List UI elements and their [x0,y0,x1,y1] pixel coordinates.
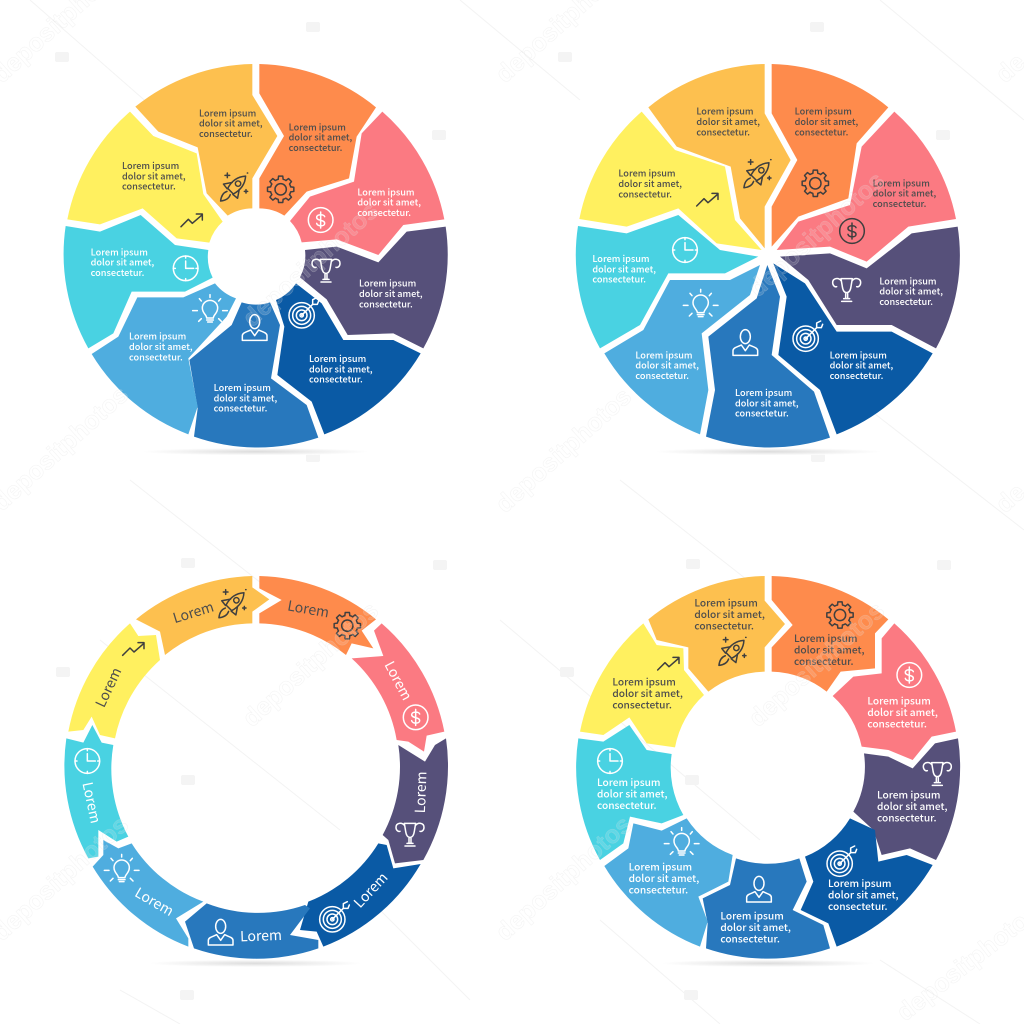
segment: light blue [93,840,203,947]
icon: gear [802,170,828,196]
segment: cyan: Lorem ipsum [597,774,660,789]
panel: bottom-left arrow ring [64,576,448,967]
icon: rocket [214,169,253,208]
watermark text: depositphotos [743,166,890,302]
segment: light blue: Lorem [131,883,177,921]
icon: person [733,330,758,355]
shadow [142,448,369,455]
segment: cyan: Lorem ipsum [91,244,148,258]
segment: orange: consectetur. [794,653,854,668]
icon: trend arrow [697,193,718,206]
segment: purple: dolor sit amet, [879,284,943,298]
segment: dark blue [773,263,933,434]
segment: cyan: Lorem [78,780,106,825]
segment: dark blue: consectetur. [828,898,888,913]
watermark text: depositphotos [743,596,890,732]
icon: target [793,321,823,351]
segment: purple: dolor sit amet, [359,286,423,300]
segment: orange: Lorem ipsum [289,119,346,133]
segment: amber [648,64,791,248]
shadow [661,960,875,967]
segment: cyan: consectetur. [592,272,646,286]
segment: orange [259,576,376,655]
icon: dollar [308,208,333,232]
segment: dark blue: Lorem [349,868,392,912]
icon: light bulb [104,854,139,882]
segment: medium blue: dolor sit amet, [720,919,791,934]
shadow [149,960,362,967]
segment: purple: consectetur. [877,810,937,825]
segment: dark blue: Lorem ipsum [830,347,887,361]
icon: trophy [923,763,951,785]
icon: target [827,846,857,876]
segment: dark blue [300,843,421,947]
segment: orange: dolor sit amet, [289,130,353,144]
segment: cyan: dolor sit amet, [91,255,155,269]
segment: cyan: Lorem ipsum [592,251,650,265]
segment: cyan [64,725,128,858]
segment: light blue: Lorem ipsum [629,859,692,874]
segment: pink: Lorem ipsum [873,175,930,189]
icon: clock [75,749,100,773]
segment: orange [772,576,888,692]
icon: clock [673,238,697,262]
segment: dark blue: consectetur. [309,372,363,386]
segment: dark blue: Lorem ipsum [828,875,891,890]
segment: purple: Lorem [410,771,431,814]
segment: amber: dolor sit amet, [199,116,263,130]
segment: pink [352,623,444,752]
segment: orange: Lorem ipsum [795,104,852,118]
segment: dark blue: consectetur. [830,368,884,382]
watermark text: depositphotos [490,810,637,946]
segment: light blue: consectetur. [635,368,689,382]
segment: light blue [604,818,733,947]
segment: light blue: consectetur. [129,349,183,363]
icon: rocket [737,156,776,195]
segment: light blue: consectetur. [629,882,688,897]
segment: yellow: consectetur. [122,179,176,193]
icon: rocket [212,586,251,625]
icon: gear [334,612,360,639]
segment: amber [648,576,785,692]
segment: cyan [576,215,758,348]
icon: target [320,902,349,932]
icon: dollar [840,219,864,243]
panel: bottom-right chart, large hub [576,576,960,967]
icon: light bulb [683,289,718,317]
segment: yellow: Lorem ipsum [612,674,676,689]
segment: pink: consectetur. [873,196,927,210]
segment: pink: dolor sit amet, [867,704,938,719]
segment: purple: Lorem ipsum [877,787,940,802]
segment: dark blue: dolor sit amet, [830,358,894,372]
segment: pink: dolor sit amet, [873,186,937,200]
segment: dark blue: Lorem ipsum [309,351,366,365]
segment: amber [136,576,269,655]
segment: pink [777,112,956,262]
segment: medium blue [185,903,318,959]
segment: cyan: dolor sit amet, [597,785,668,800]
segment: medium blue: consectetur. [735,406,789,420]
segment: orange [772,64,888,247]
segment: light blue: Lorem ipsum [129,329,186,343]
segment: yellow: Lorem ipsum [618,166,676,180]
segment: yellow [579,112,762,250]
segment: amber: consectetur. [696,124,750,138]
shadow [655,448,881,455]
segment: pink: consectetur. [867,715,927,730]
segment: dark blue [801,818,933,947]
icon: trend arrow [181,214,202,227]
segment: orange: dolor sit amet, [795,114,859,128]
icon: light bulb [664,828,699,855]
segment: light blue [604,265,760,434]
panel: top-right chart, pointed hub [576,64,960,455]
segment: orange [259,64,376,216]
icon: person [747,876,771,902]
segment: amber: Lorem [170,597,216,628]
segment: light blue: Lorem ipsum [635,347,693,361]
segment: dark blue: dolor sit amet, [828,886,899,901]
segment: dark blue: dolor sit amet, [309,361,373,375]
segment: purple: Lorem ipsum [879,273,937,287]
icon: person [242,315,267,340]
segment: yellow: dolor sit amet, [618,176,682,190]
icon: trophy [833,279,861,301]
segment: cyan [64,215,213,348]
segment: cyan [576,725,683,860]
segment: pink: dolor sit amet, [357,195,421,209]
segment: dark blue [276,283,421,434]
segment: yellow: consectetur. [618,186,672,200]
panel: top-left chart, small hub [64,64,448,455]
icon: light bulb [193,295,227,322]
icon: clock [173,256,198,281]
segment: cyan: dolor sit amet, [592,261,656,275]
segment: medium blue: consectetur. [720,930,780,945]
segment: amber: Lorem ipsum [199,105,256,119]
icon: gear [827,602,853,628]
segment: medium blue: Lorem ipsum [720,907,784,922]
icon: clock [598,749,622,773]
icon: dollar [403,705,428,730]
segment: purple [780,227,960,348]
segment: pink: Lorem ipsum [357,184,415,198]
segment: medium blue: Lorem ipsum [735,385,792,399]
icon: gear [267,176,294,202]
segment: yellow: Lorem ipsum [122,158,179,172]
segment: purple: dolor sit amet, [877,798,948,813]
segment: purple: Lorem ipsum [359,276,416,290]
icon: target [289,298,319,328]
segment: orange: dolor sit amet, [794,641,865,656]
icon: dollar [897,663,922,687]
segment: yellow [67,112,223,243]
segment: medium blue: dolor sit amet, [214,390,278,404]
segment: amber: consectetur. [199,126,253,140]
watermark text: depositphotos [490,382,637,518]
segment: cyan: consectetur. [597,797,657,812]
segment: pink: consectetur. [357,205,411,219]
watermark text: depositphotos [237,196,384,332]
segment: yellow: dolor sit amet, [122,168,186,182]
segment: amber: dolor sit amet, [696,114,760,128]
icon: trophy [312,259,340,282]
segment: pink: Lorem ipsum [867,692,931,707]
icon: trophy [396,823,424,846]
segment: yellow: dolor sit amet, [612,685,683,700]
segment: pink [833,623,956,760]
segment: purple [300,227,448,348]
segment: light blue: dolor sit amet, [129,339,193,353]
segment: yellow: Lorem [90,664,126,711]
segment: purple: consectetur. [359,296,413,310]
watermark text: depositphotos [237,596,384,732]
segment: yellow [68,623,160,738]
segment: light blue: dolor sit amet, [629,870,699,885]
segment: pink: Lorem [380,657,417,704]
segment: yellow [580,623,704,747]
segment: medium blue [703,858,830,959]
segment: pink [290,112,444,255]
icon: person [208,919,233,945]
segment: amber [135,64,277,216]
segment: purple [853,738,960,860]
segment: light blue [92,283,236,434]
icon: trend arrow [123,643,144,655]
segment: medium blue: dolor sit amet, [735,395,799,409]
segment: purple: consectetur. [879,294,933,308]
segment: cyan: consectetur. [91,265,145,279]
segment: yellow: consectetur. [612,697,672,712]
icon: rocket [712,633,751,672]
segment: medium blue: Lorem [240,925,282,946]
segment: light blue: dolor sit amet, [635,358,699,372]
segment: amber: dolor sit amet, [694,606,765,621]
segment: orange: consectetur. [795,124,849,138]
segment: amber: Lorem ipsum [696,104,754,118]
segment: purple [383,738,448,863]
segment: orange: Lorem [286,596,331,622]
icon: trend arrow [658,657,679,670]
segment: medium blue: Lorem ipsum [214,380,271,394]
segment: orange: Lorem ipsum [794,630,857,645]
segment: amber: Lorem ipsum [694,594,758,609]
segment: medium blue [189,302,318,448]
segment: orange: consectetur. [289,140,343,154]
segment: medium blue: consectetur. [214,401,268,415]
segment: medium blue [706,265,830,447]
segment: amber: consectetur. [694,617,754,632]
